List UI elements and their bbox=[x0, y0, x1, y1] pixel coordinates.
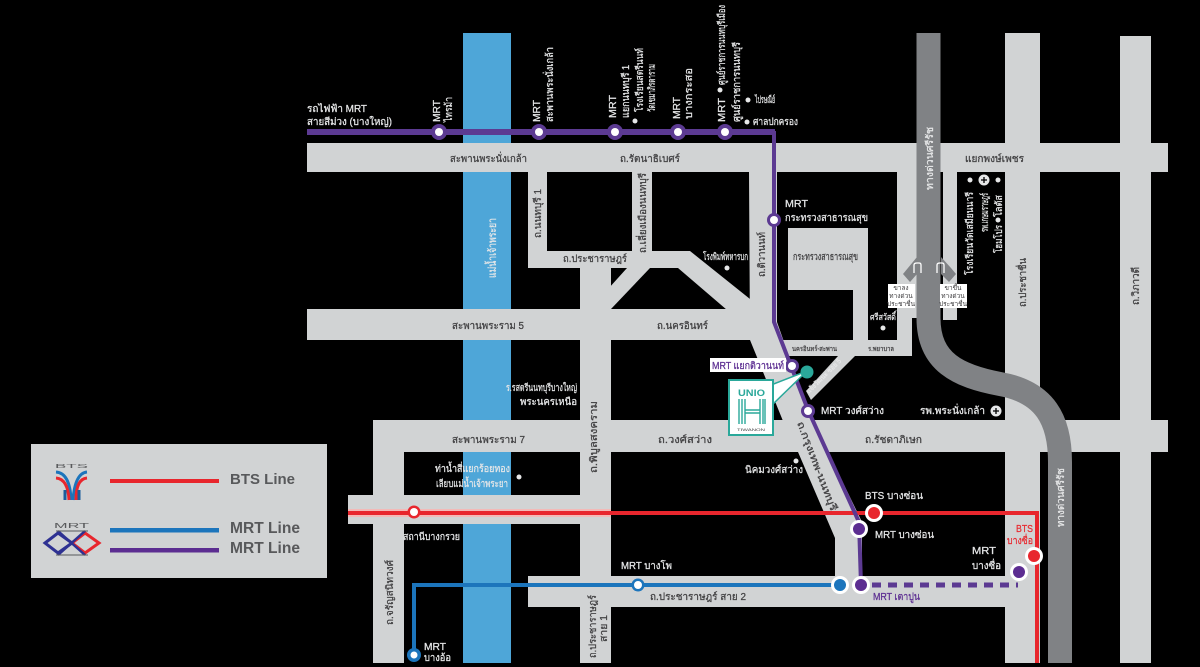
line sample: MRT blue bbox=[110, 528, 219, 532]
station: MRT blue junction bbox=[831, 576, 849, 594]
label: MRT Bang Son: MRT บางซ่อน bbox=[875, 530, 934, 541]
station: Ministry of Public Health bbox=[767, 213, 781, 227]
bullet bbox=[744, 120, 750, 124]
label: Public Health ministry: กระทรวงสาธารณสุข bbox=[793, 252, 858, 263]
label: Prachachuen road: ถ.ประชาชื่น bbox=[1015, 258, 1029, 307]
label: Sai Ma name: ไทรม้า bbox=[443, 97, 455, 123]
label: Phong Phet junction: แยกพงษ์เพชร bbox=[965, 153, 1025, 165]
label: Sai Ma: MRT bbox=[432, 100, 443, 122]
label: Nakhon In road: ถ.นครอินทร์ bbox=[657, 320, 709, 332]
label: Sisawat: ศรีสวัสดิ์ bbox=[870, 310, 897, 322]
line sample: MRT purple bbox=[110, 548, 219, 552]
label: river name: แม่น้ำเจ้าพระยา bbox=[484, 218, 499, 278]
road: Nonthaburi 1 bbox=[528, 172, 547, 268]
line sample: BTS bbox=[110, 479, 219, 483]
station: Bang Phlat bbox=[407, 648, 421, 662]
label: Bang Krasor name: บางกระสอ bbox=[684, 68, 695, 119]
label: post office: ไปรษณีย์ bbox=[754, 94, 775, 106]
road: Tiwanon and Krung Thep-Nonthaburi bbox=[749, 172, 862, 576]
icon: BTS logo: BTS bbox=[55, 464, 90, 470]
label: MRT public health: MRT bbox=[785, 199, 808, 210]
label: Wong Sawang road: ถ.วงศ์สว่าง bbox=[658, 434, 712, 446]
icon: BTS logo bbox=[55, 464, 90, 500]
label: BTS Bang Sue: BTS bbox=[1016, 524, 1033, 535]
sign: west ramp: ประชาชื่น bbox=[887, 299, 916, 308]
bullet bbox=[968, 178, 972, 182]
station: Bang Krasor bbox=[670, 124, 686, 140]
logo box bbox=[729, 380, 773, 435]
expressway ramp arrows bbox=[903, 257, 956, 282]
label: Bang Krasor: MRT bbox=[672, 97, 683, 119]
road: Bypass Nonthaburi bbox=[632, 172, 652, 268]
label: MRT Bang Sue: MRT bbox=[972, 546, 996, 557]
label: bypass road: ถ.เลี่ยงเมืองนนทบุรี bbox=[635, 172, 649, 253]
sign: east ramp: ทางด่วน bbox=[941, 293, 965, 300]
icon: ramp east bbox=[937, 263, 944, 273]
label: Yaek Nonthaburi name: แยกนนทบุรี 1 bbox=[620, 65, 632, 118]
labels: roads bbox=[384, 151, 1142, 658]
label: Phra Nang Klao bridge: สะพานพระนั่งเกล้า bbox=[450, 151, 527, 165]
MRT blue line bbox=[414, 585, 840, 655]
road: Pracharat bbox=[528, 251, 683, 268]
bullet bbox=[516, 474, 522, 480]
label: school west line one: ร.รสตรีนนทบุรีบางใหญ่ bbox=[506, 382, 577, 394]
label: school line two: วัดเขมาภิรตาราม bbox=[647, 64, 658, 112]
station: BTS Bang Sue bbox=[1025, 547, 1043, 565]
icon: MRT logo bbox=[45, 523, 99, 555]
icon: hospital east bbox=[978, 174, 990, 186]
station: Bang Pho bbox=[632, 578, 644, 592]
label: MRT Wong Sawang: MRT วงศ์สว่าง bbox=[821, 405, 884, 417]
purple dashed extension bbox=[872, 582, 1018, 588]
stations bbox=[407, 124, 1043, 662]
label: purple line name: สายสีม่วง (บางใหญ่) bbox=[307, 116, 392, 128]
label: pier line one: ท่าน้ำสี่แยกร้อยทอง bbox=[435, 461, 510, 475]
road: Charan Sanitwong bbox=[373, 420, 404, 663]
label: expressway lower: ทางด่วนศรีรัช bbox=[1055, 468, 1067, 527]
sign: east ramp bbox=[939, 283, 968, 308]
road: east expressway ramp bbox=[943, 172, 957, 320]
label: hospital: รพ.พระนั่งเกล้า bbox=[920, 403, 985, 417]
label: Civic Center: MRT bbox=[717, 98, 728, 122]
arrow: ramp left bbox=[903, 257, 917, 282]
road: BTS corridor bbox=[348, 495, 611, 524]
road: Pracharat Sai 2 bbox=[528, 576, 1040, 607]
location pin bbox=[800, 366, 814, 378]
station: Yaek Nonthaburi 1 bbox=[607, 124, 623, 140]
label: administrative court: ศาลปกครอง bbox=[753, 117, 798, 128]
road: Rattanathibet bbox=[307, 143, 1168, 172]
label: Pracharat Sai 1 road: ถ.ประชาราษฎร์ bbox=[587, 594, 599, 658]
legend label: MRT blue: MRT Line bbox=[230, 520, 300, 537]
bullet bbox=[632, 118, 638, 124]
BTS line halo on road bbox=[348, 509, 611, 517]
panel: legend bbox=[31, 444, 327, 578]
expressway Si Rat bbox=[928, 33, 1060, 663]
BTS red line bbox=[348, 513, 1037, 663]
station: Yaek Tiwanon bbox=[785, 359, 799, 373]
label: MRT public health name: กระทรวงสาธารณสุข bbox=[785, 213, 868, 224]
station: Phra Nang Klao bbox=[531, 124, 547, 140]
sign: east ramp: ประชาชื่น bbox=[939, 299, 968, 308]
sign: west ramp: ทางด่วน bbox=[889, 293, 913, 300]
label: Phibun Songkhram road: ถ.พิบูลสงคราม bbox=[589, 401, 600, 473]
label: Ratchadaphisek road: ถ.รัชดาภิเษก bbox=[865, 435, 922, 446]
label: school west line two: พระนครเหนือ bbox=[520, 396, 577, 408]
label: soi diagonal: แจ้งวัฒนะ ซอย 5 bbox=[805, 357, 843, 395]
road: diagonal connector east bbox=[678, 251, 750, 310]
label: Wong Sawang poi: นิคมวงศ์สว่าง bbox=[745, 464, 803, 476]
label: MRT Tao Poon: MRT เตาปูน bbox=[873, 592, 920, 603]
label: Vibhavadi road: ถ.วิภาวดี bbox=[1130, 267, 1142, 305]
road: Rama 5 bridge and Nakhon In bbox=[307, 309, 752, 340]
bullet bbox=[996, 178, 1000, 182]
label: BTS Bang Son: BTS บางซ่อน bbox=[865, 491, 923, 502]
label: Tiwanon road: ถ.ติวานนท์ bbox=[756, 232, 768, 277]
road: Phibun Songkhram bbox=[580, 268, 611, 663]
station: MRT Bang Son bbox=[850, 520, 868, 538]
road: west expressway ramp bbox=[897, 172, 917, 356]
label: Bikini point: โรงพิมพ์ทหารบก bbox=[703, 250, 748, 263]
station: Wong Sawang bbox=[801, 404, 815, 418]
icon: hospital bbox=[990, 406, 1002, 416]
purple top section bbox=[307, 129, 775, 135]
logo subtext: TIWANON bbox=[737, 427, 765, 432]
icon: ramp west bbox=[914, 263, 921, 273]
station: MRT Bang Sue bbox=[1010, 563, 1028, 581]
label: Rattanathibet road: ถ.รัตนาธิเบศร์ bbox=[620, 153, 681, 165]
road: Ministry of Public Health block bbox=[788, 228, 868, 356]
legend label: MRT purple: MRT Line bbox=[230, 540, 300, 557]
arrow: ramp right bbox=[941, 257, 956, 282]
label: MRT Bang Sue name: บางซื่อ bbox=[972, 558, 1001, 572]
labels: top purple line bbox=[307, 5, 798, 128]
station: Nonthaburi Civic Center bbox=[717, 124, 733, 140]
label: pier line two: เลียบแม่น้ำเจ้าพระยา bbox=[436, 476, 508, 490]
road: Rama 7 and Wong Sawang bbox=[373, 420, 1168, 452]
label: east place 1: โลตัส bbox=[992, 195, 1005, 217]
logo letter H bbox=[739, 399, 765, 424]
label: MRT purple line: รถไฟฟ้า MRT bbox=[307, 103, 367, 115]
label: Bang Phlat: MRT bbox=[424, 642, 446, 653]
label: Rama 7 bridge: สะพานพระราม 7 bbox=[452, 435, 525, 446]
station: Sai Ma bbox=[431, 124, 447, 140]
bullet bbox=[996, 218, 1000, 222]
station: BTS Bang Kruai bbox=[408, 506, 420, 518]
road: soi diagonal bbox=[806, 356, 855, 400]
label: Bang Kruai: สถานีบางกรวย bbox=[403, 531, 460, 543]
label: side road west: นครอินทร์-สะพาน bbox=[792, 345, 837, 353]
label: Rama 5 bridge: สะพานพระราม 5 bbox=[452, 321, 524, 332]
label: east place 2: โฮมโปร bbox=[992, 224, 1005, 253]
legend label: BTS: BTS Line bbox=[230, 471, 295, 488]
legend background bbox=[31, 444, 327, 578]
label: Pracharat Sai 2 road: ถ.ประชาราษฎร์ สาย 2 bbox=[650, 591, 746, 603]
label: Pracharat road: ถ.ประชาราษฎร์ bbox=[563, 253, 628, 265]
station: Tao Poon bbox=[852, 576, 870, 594]
road: Vibhavadi bbox=[1120, 36, 1151, 663]
label: Phra Nang Klao name: สะพานพระนั่งเกล้า bbox=[542, 47, 556, 122]
label: Krung Thep-Nonthaburi road: ถ.กรุงเทพ-นนทบุรี bbox=[794, 420, 840, 513]
label: school east 1: โรงเรียนวัดเสมียนนารี bbox=[963, 191, 976, 275]
sign: east ramp: ขาขึ้น bbox=[945, 283, 962, 292]
river: Chao Phraya bbox=[463, 33, 511, 663]
label: Civic Center name: ศูนย์ราชการนนทบุรี bbox=[731, 41, 743, 122]
label: Yaek Nonthaburi: MRT bbox=[608, 95, 619, 118]
bullet bbox=[746, 98, 750, 102]
label: MRT Yaek Tiwanon: MRT แยกติวานนท์ bbox=[712, 360, 784, 372]
road: Prachachuen bbox=[1005, 33, 1040, 663]
purple vertical section bbox=[774, 131, 861, 585]
bullet bbox=[794, 458, 798, 464]
logo text UNIO: UNIO bbox=[738, 388, 765, 398]
callout pointer bbox=[771, 371, 807, 404]
label: Bang Phlat name: บางอ้อ bbox=[424, 652, 451, 664]
expressway ramp signs bbox=[887, 263, 968, 308]
bullet bbox=[880, 326, 886, 330]
MRT purple line bbox=[307, 131, 1018, 585]
road: side road bbox=[780, 340, 912, 356]
station: BTS Bang Son bbox=[865, 504, 883, 522]
label: side road east: ร.พยาบาล bbox=[868, 346, 894, 353]
road: diagonal connector west bbox=[590, 268, 650, 309]
sign: west ramp: ขาลง bbox=[893, 285, 909, 292]
sign: west ramp bbox=[887, 284, 916, 308]
label: Nonthaburi 1 road: ถ.นนทบุรี 1 bbox=[532, 189, 544, 238]
label: BTS Bang Sue name: บางซื่อ bbox=[1007, 533, 1033, 547]
label: Charan Sanitwong road: ถ.จรัญสนิทวงศ์ bbox=[384, 559, 396, 625]
label: hospital east: รพ.เกษมราษฎร์ bbox=[979, 193, 991, 232]
label: Sai 1: สาย 1 bbox=[599, 615, 610, 642]
icon: MRT logo: MRT bbox=[54, 523, 91, 530]
road network bbox=[307, 33, 1168, 663]
label: Bang Pho: MRT บางโพ bbox=[621, 559, 672, 572]
project callout: UNIO H Tiwanon bbox=[729, 366, 814, 435]
labels: points of interest bbox=[403, 127, 1067, 664]
label: expressway upper: ทางด่วนศรีรัช bbox=[924, 127, 936, 190]
bullet bbox=[724, 266, 730, 270]
label: Phra Nang Klao: MRT bbox=[532, 100, 543, 122]
label: school line one: โรงเรียนสตรีนนท์ bbox=[633, 48, 646, 112]
bullet bbox=[718, 88, 722, 92]
